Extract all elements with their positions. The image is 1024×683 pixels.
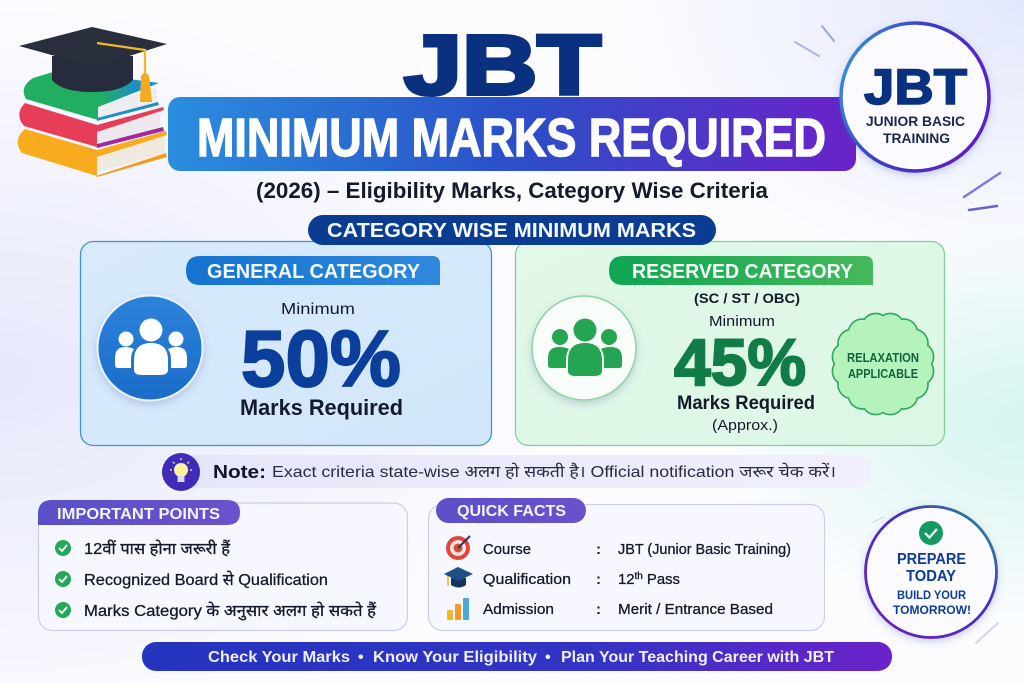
- minimum label: Minimum: [709, 313, 775, 330]
- note bar: [162, 453, 871, 491]
- decorative badge: JBT junior basic training: TRAINING: [883, 130, 950, 146]
- footer bar: [142, 642, 892, 671]
- badge: relaxation applicable: [832, 313, 934, 415]
- banner: minimum marks required: MINIMUM MARKS REQUIRED: [197, 108, 826, 168]
- approx label: (Approx.): [712, 417, 778, 434]
- icon: people group, general: [98, 296, 202, 400]
- decorative badge: JBT junior basic training: [841, 23, 989, 171]
- row: qualification: Pass: [643, 571, 680, 588]
- decorative badge: JBT junior basic training: JBT: [864, 59, 967, 115]
- footer bar: •: [358, 649, 364, 666]
- row: qualification: [444, 567, 680, 588]
- row: course: :: [596, 541, 601, 558]
- important points heading: [38, 500, 240, 525]
- note text: Exact criteria state-wise अलग हो सकती है। Official notification जरूर चेक करें।: [272, 462, 836, 481]
- badge: prepare today: TODAY: [906, 568, 956, 585]
- quick facts heading: QUICK FACTS: [457, 503, 566, 520]
- red book: [19, 103, 164, 148]
- green book: [24, 70, 159, 121]
- marks required label: Marks Required: [240, 395, 403, 420]
- footer bar: Check Your Marks: [208, 649, 350, 666]
- yellow book: [18, 129, 167, 177]
- panel: general category: [80, 242, 492, 446]
- minimum label: Minimum: [281, 301, 355, 318]
- footer bar: •: [545, 649, 551, 666]
- section heading: category wise minimum marks: CATEGORY WISE MINIMUM MARKS: [327, 220, 696, 242]
- banner: minimum marks required: [168, 97, 856, 171]
- badge: relaxation applicable: RELAXATION: [847, 350, 919, 365]
- point 1: 12वीं पास होना जरूरी हैं: [84, 539, 231, 558]
- row: course: JBT (Junior Basic Training): [618, 541, 791, 558]
- section heading: category wise minimum marks: [308, 215, 716, 245]
- title: JBT: JBT: [404, 18, 601, 112]
- row: course: [446, 536, 791, 560]
- row: qualification: :: [596, 571, 601, 588]
- panel: quick facts: [428, 498, 824, 630]
- point 3: Marks Category के अनुसार अलग हो सकते हैं: [84, 601, 377, 621]
- badge: relaxation applicable: APPLICABLE: [848, 366, 918, 381]
- badge: prepare today: TOMORROW!: [893, 603, 971, 617]
- graduation cap: [19, 27, 167, 102]
- icon: light bulb: [162, 453, 200, 491]
- panel: reserved category: [516, 242, 944, 446]
- icon: graduation cap on stack of books: [18, 27, 167, 177]
- badge: prepare today: PREPARE: [897, 551, 966, 568]
- note text: [213, 462, 836, 482]
- subtitle: (2026) – Eligibility Marks, Category Wise Criteria: [256, 178, 769, 203]
- reserved heading: [609, 256, 873, 285]
- row: course: Course: [483, 541, 531, 558]
- accent streaks: [795, 26, 1000, 643]
- reserved heading: RESERVED CATEGORY: [632, 261, 854, 283]
- footer bar: Know Your Eligibility: [373, 649, 537, 666]
- row: qualification: 12: [618, 571, 635, 588]
- badge: prepare today: BUILD YOUR: [897, 588, 966, 602]
- reserved sub-label: (SC / ST / OBC): [694, 290, 800, 306]
- decorative badge: JBT junior basic training: JUNIOR BASIC: [866, 113, 965, 129]
- icon: people group, reserved: [532, 296, 636, 400]
- row: qualification: th: [635, 571, 643, 582]
- row: admission: [447, 598, 773, 620]
- row: qualification: Qualification: [483, 571, 571, 588]
- note text: Note:: [213, 462, 266, 482]
- row: admission: Merit / Entrance Based: [618, 601, 773, 618]
- icon: check: [919, 521, 943, 545]
- point 2: Recognized Board से Qualification: [84, 570, 328, 589]
- important points heading: IMPORTANT POINTS: [57, 506, 220, 523]
- general heading: [186, 256, 440, 285]
- 45 percent: 45%: [674, 325, 806, 399]
- footer bar: Plan Your Teaching Career with JBT: [561, 649, 834, 666]
- 50 percent: 50%: [241, 314, 401, 403]
- quick facts heading: [436, 498, 586, 523]
- badge: prepare today: [866, 506, 996, 638]
- marks required label: Marks Required: [677, 393, 815, 414]
- panel: important points: [38, 500, 408, 630]
- row: admission: :: [596, 601, 601, 618]
- general heading: GENERAL CATEGORY: [207, 261, 421, 283]
- row: admission: Admission: [483, 601, 554, 618]
